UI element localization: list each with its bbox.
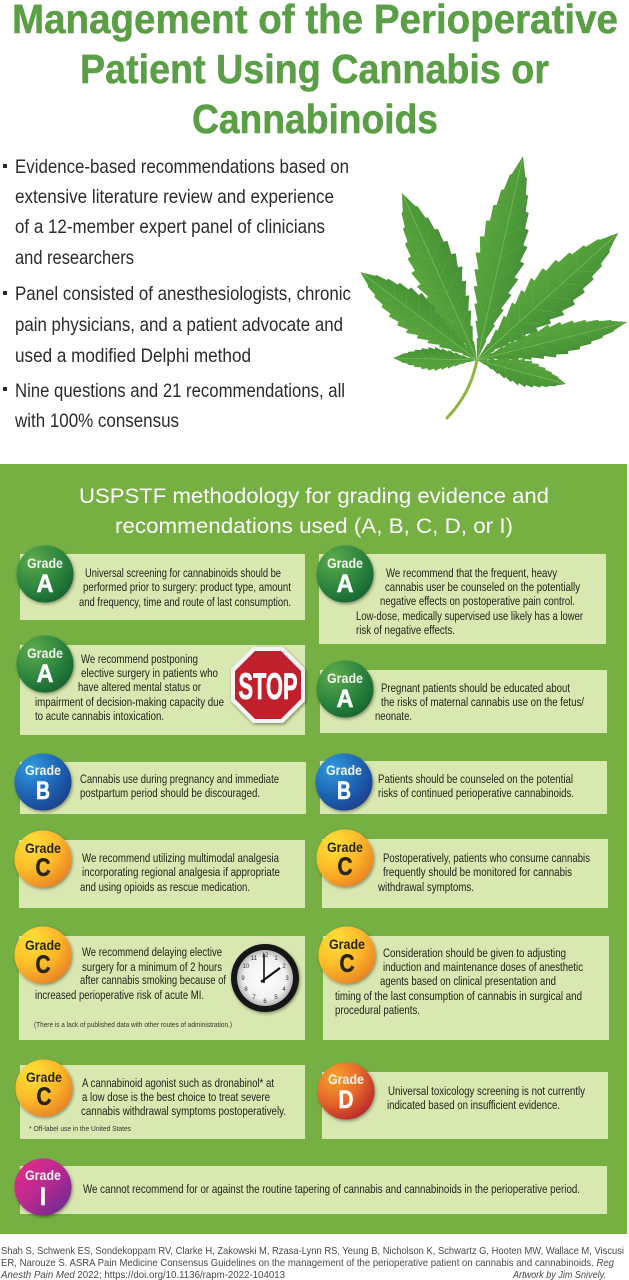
card: Grade D toxicology screening <box>318 1062 608 1139</box>
icon: clock: 11 <box>251 956 258 962</box>
icon: clock: 5 <box>274 995 278 1001</box>
card: Grade A heavy user counseling: risk of negative effects. <box>356 623 455 637</box>
title: Patient Using Cannabis or <box>80 46 549 92</box>
bullet list: panel summary: Nine questions and 21 recommendations, all <box>15 380 345 402</box>
bullet list: panel summary: and researchers <box>15 247 134 269</box>
citation footer <box>0 1245 624 1280</box>
card: Grade C delay surgery <box>14 926 305 1040</box>
card: Grade C cannabinoid agonist: * Off-label use in the United States <box>29 1124 131 1133</box>
bullet list: panel summary: of a 12-member expert panel of clinicians <box>15 216 325 238</box>
card: Grade C adjust anesthetic doses: Consideration should be given to adjusting <box>383 946 566 960</box>
card: Grade A heavy user counseling: A <box>336 570 354 598</box>
card: Grade A pregnant patients educated: Pregnant patients should be educated about <box>381 681 570 695</box>
icon: clock: 12 <box>262 953 269 959</box>
card: Grade B pregnancy use: B <box>36 777 50 805</box>
card: Grade A postponing surgery: impairment of decision-making capacity due <box>35 695 224 709</box>
card: Grade B continued use risks <box>316 754 607 814</box>
card: Grade C delay surgery: We recommend delaying elective <box>82 945 222 959</box>
panel heading: recommendations used (A, B, C, D, or I) <box>115 514 513 538</box>
icon: cannabis leaf <box>348 151 629 418</box>
icon: clock: 1 <box>274 956 278 962</box>
card: Grade B continued use risks: risks of continued perioperative cannabinoids. <box>378 786 574 800</box>
card: Grade A universal screening: Universal screening for cannabinoids should be <box>85 566 281 580</box>
card: Grade C delay surgery: (There is a lack of published data with other routes of administration.) <box>34 1020 232 1029</box>
card: Grade A pregnant patients educated: neonate. <box>375 709 412 723</box>
card: Grade B pregnancy use: Grade <box>25 763 61 778</box>
card: Grade A universal screening: Grade <box>27 556 63 571</box>
card: Grade D toxicology screening: Grade <box>328 1072 364 1087</box>
card: Grade A heavy user counseling: We recommend that the frequent, heavy <box>386 566 558 580</box>
card: Grade C monitor withdrawal: withdrawal symptoms. <box>377 880 474 894</box>
card: Grade A universal screening <box>16 546 305 620</box>
card: Grade C adjust anesthetic doses <box>318 926 609 1040</box>
card: Grade A universal screening: and frequency, time and route of last consumption. <box>79 595 291 609</box>
card: Grade C multimodal analgesia <box>14 830 305 908</box>
bullet list: panel summary: used a modified Delphi method <box>15 345 251 367</box>
card: Grade A postponing surgery: We recommend postponing <box>81 652 198 666</box>
card: Grade C multimodal analgesia: and using opioids as rescue medication. <box>80 880 250 894</box>
icon: clock: 8 <box>244 987 248 993</box>
icon: stop sign <box>231 647 305 723</box>
card: Grade A pregnant patients educated <box>316 660 607 733</box>
card: Grade C monitor withdrawal: Grade <box>327 840 363 855</box>
card: Grade C multimodal analgesia: We recommend utilizing multimodal analgesia <box>82 851 279 865</box>
card: Grade C adjust anesthetic doses: procedural patients. <box>335 1003 420 1017</box>
card: Grade C monitor withdrawal: frequently should be monitored for cannabis <box>383 865 572 879</box>
icon: clock: 4 <box>282 987 286 993</box>
title: Cannabinoids <box>192 96 438 142</box>
bullet list: panel summary: with 100% consensus <box>14 410 179 432</box>
card: Grade C multimodal analgesia: incorporating regional analgesia if appropriate <box>82 865 280 879</box>
card: Grade C monitor withdrawal <box>316 830 608 908</box>
card: Grade A heavy user counseling: negative effects on postoperative pain control. <box>380 594 575 608</box>
card: Grade C adjust anesthetic doses: C <box>340 950 354 978</box>
card: Grade A heavy user counseling <box>316 546 606 644</box>
card: Grade C cannabinoid agonist: cannabis withdrawal symptoms postoperatively. <box>81 1104 286 1118</box>
panel heading: USPSTF methodology for grading evidence and <box>79 484 549 508</box>
card: Grade D toxicology screening: indicated based on insufficient evidence. <box>387 1098 560 1112</box>
card: Grade B pregnancy use: Cannabis use during pregnancy and immediate <box>80 772 279 786</box>
card: Grade C delay surgery: C <box>36 951 50 979</box>
card: Grade A pregnant patients educated: A <box>336 685 354 713</box>
icon: clock: 9 <box>241 976 245 982</box>
card: Grade C delay surgery: after cannabis smoking because of <box>80 973 226 987</box>
panel: USPSTF grading <box>0 464 627 1234</box>
card: Grade D toxicology screening: D <box>338 1086 354 1114</box>
card: Grade A universal screening: A <box>36 570 54 598</box>
card: Grade C multimodal analgesia: C <box>36 854 50 882</box>
card: Grade I tapering: Grade <box>25 1168 61 1183</box>
card: Grade C monitor withdrawal: C <box>338 853 352 881</box>
card: Grade C adjust anesthetic doses: Grade <box>329 937 365 952</box>
icon: clock: 10 <box>243 964 250 970</box>
card: Grade C adjust anesthetic doses: agents based on clinical presentation and <box>380 974 556 988</box>
card: Grade A postponing surgery <box>16 636 305 735</box>
icon: clock: 3 <box>285 976 289 982</box>
card: Grade C cannabinoid agonist: Grade <box>26 1070 62 1085</box>
icon: clock: 7 <box>252 995 256 1001</box>
card: Grade B continued use risks: Patients should be counseled on the potential <box>378 772 573 786</box>
bullet list: panel summary: Evidence-based recommendations based on <box>15 156 349 178</box>
card: Grade C cannabinoid agonist: C <box>36 1083 52 1111</box>
card: Grade C delay surgery: Grade <box>25 938 61 953</box>
card: Grade B pregnancy use: postpartum period should be discouraged. <box>80 786 260 800</box>
card: Grade C multimodal analgesia: Grade <box>25 841 61 856</box>
icon: clock: 2 <box>282 964 286 970</box>
card: Grade C cannabinoid agonist <box>16 1060 305 1139</box>
card: Grade A postponing surgery: to acute cannabis intoxication. <box>35 709 164 723</box>
bullet list: panel summary: Panel consisted of anesthesiologists, chronic <box>15 283 351 305</box>
card: Grade A universal screening: performed prior to surgery: product type, amount <box>83 580 291 594</box>
card: Grade I tapering: I <box>40 1183 46 1211</box>
bullet list: panel summary: extensive literature review and experience <box>15 186 334 208</box>
card: Grade A postponing surgery: Grade <box>27 646 63 661</box>
card: Grade C delay surgery: increased perioperative risk of acute MI. <box>35 988 204 1002</box>
icon: stop sign: STOP <box>238 666 298 707</box>
card: Grade A postponing surgery: have altered mental status or <box>78 680 201 694</box>
card: Grade B continued use risks: B <box>337 777 351 805</box>
card: Grade A postponing surgery: A <box>36 660 54 688</box>
card: Grade A heavy user counseling: Grade <box>327 556 363 571</box>
card: Grade A heavy user counseling: cannabis user be counseled on the potentially <box>385 580 581 594</box>
card: Grade A pregnant patients educated: Grade <box>327 671 363 686</box>
bullet list: panel summary: pain physicians, and a patient advocate and <box>15 314 343 336</box>
card: Grade A postponing surgery: elective surgery in patients who <box>81 666 218 680</box>
card: Grade B continued use risks: Grade <box>326 763 362 778</box>
card: Grade C delay surgery: surgery for a minimum of 2 hours <box>82 960 222 974</box>
card: Grade B pregnancy use <box>14 754 306 814</box>
icon: clock: 6 <box>263 999 267 1005</box>
card: Grade C cannabinoid agonist: A cannabinoid agonist such as dronabinol* at <box>82 1076 274 1090</box>
card: Grade I tapering <box>14 1158 607 1216</box>
title <box>12 0 618 142</box>
bullet list: panel summary <box>3 156 351 432</box>
icon: clock <box>231 944 299 1012</box>
card: Grade C cannabinoid agonist: a low dose is the best choice to treat severe <box>82 1090 270 1104</box>
panel heading <box>79 484 549 538</box>
